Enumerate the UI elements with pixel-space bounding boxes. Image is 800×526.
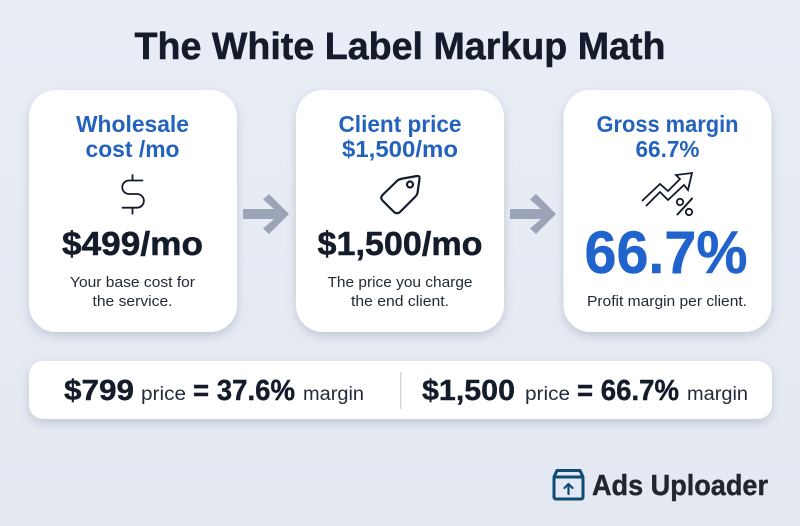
comparison: $1,500 price — [422, 375, 748, 407]
heading: client price: Client price — [338, 111, 462, 137]
value: 66.7%: 66.7% — [584, 219, 748, 286]
comparison: $799 price: margin — [303, 384, 364, 405]
logo: Ads Uploader — [554, 470, 768, 502]
description: the end client. — [351, 294, 449, 310]
panel: gross margin — [564, 90, 772, 332]
comparison: $1,500 price: price — [525, 384, 570, 405]
description — [70, 275, 195, 310]
heading: client price: $1,500/mo — [342, 136, 458, 162]
comparison: $799 price: $799 — [64, 375, 134, 407]
value: $499/mo: $499/mo — [62, 225, 203, 262]
comparison: $799 price: = 37.6% — [193, 375, 295, 407]
comparison: $1,500 price: margin — [687, 384, 748, 405]
description: The price you charge — [328, 275, 472, 291]
heading: wholesale cost: cost /mo — [86, 136, 180, 162]
heading: wholesale cost: Wholesale — [76, 111, 189, 137]
heading: client price — [338, 111, 462, 162]
description: Your base cost for — [70, 275, 195, 291]
icon: price tag — [381, 176, 420, 213]
heading: gross margin — [596, 111, 738, 162]
description: Profit margin per client. — [587, 294, 747, 310]
heading: gross margin: 66.7% — [636, 136, 700, 162]
heading: wholesale cost — [76, 111, 189, 162]
value: $1,500/mo: $1,500/mo — [318, 225, 482, 262]
comparison: $799 price — [64, 375, 364, 407]
comparison: $1,500 price: $1,500 — [422, 375, 515, 407]
heading: gross margin: Gross margin — [596, 111, 738, 137]
description: the service. — [92, 294, 172, 310]
panel: price comparison bar — [29, 361, 772, 419]
icon: upload box — [554, 470, 583, 499]
description — [328, 275, 472, 310]
title: The White Label Markup Math — [134, 26, 666, 68]
panel: wholesale cost — [29, 90, 237, 332]
arrow: wholesale to client — [243, 194, 289, 234]
icon: dollar sign — [122, 175, 144, 214]
wordmark: Ads Uploader — [592, 470, 768, 502]
panel: client price — [296, 90, 504, 332]
icon: rising chart with percent — [642, 173, 692, 215]
comparison: $1,500 price: = 66.7% — [577, 375, 679, 407]
comparison: $799 price: price — [141, 384, 186, 405]
arrow: client to margin — [510, 194, 556, 234]
